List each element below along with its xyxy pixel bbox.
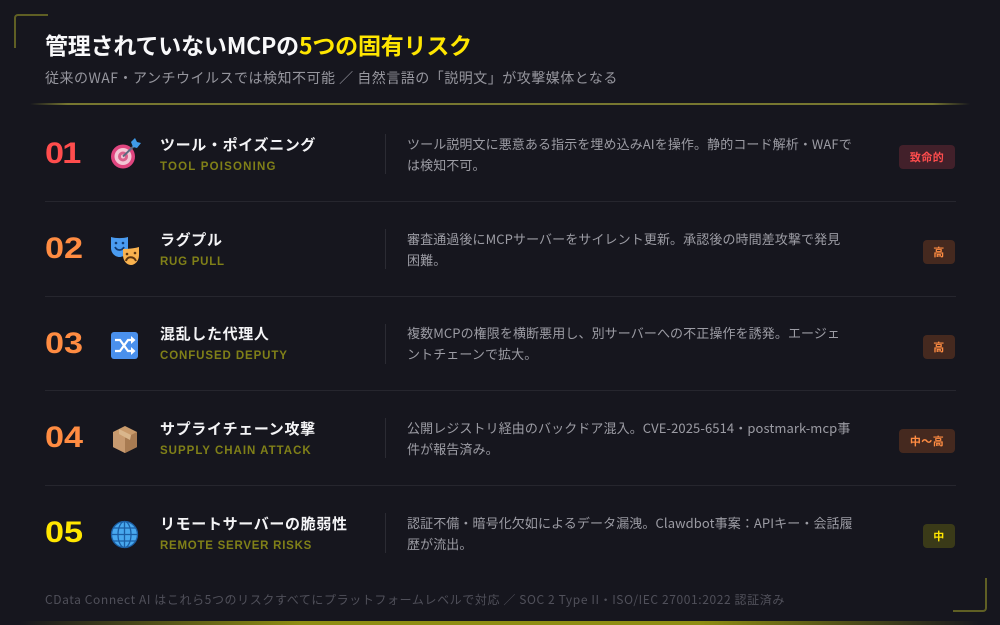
footer note: CData Connect AI はこれら5つのリスクすべてにプラットフォームレベルで対応 ／ SOC 2 Type II・ISO/IEC 27001:2022 認証済み	[45, 591, 785, 608]
description: 認証不備・暗号化欠如によるデータ漏洩。Clawdbot事案：APIキー・会話履	[407, 513, 853, 532]
english label: REMOTE SERVER RISKS	[160, 540, 312, 552]
description	[407, 418, 850, 458]
icon: theatre masks	[111, 237, 139, 265]
corner bracket: top left	[14, 14, 48, 48]
icon: target with dart	[111, 138, 141, 168]
risk name: サプライチェーン攻撃	[160, 418, 316, 439]
severity badge	[899, 429, 955, 453]
english label: SUPPLY CHAIN ATTACK	[160, 445, 312, 457]
number 02: 02	[45, 232, 83, 265]
risk row 02	[45, 229, 955, 269]
description	[407, 134, 852, 174]
severity badge: 高	[933, 244, 945, 260]
description: ントチェーンで拡大。	[407, 344, 537, 363]
corner bracket: bottom right	[953, 578, 987, 612]
description	[407, 513, 853, 553]
description: 審査通過後にMCPサーバーをサイレント更新。承認後の時間差攻撃で発見	[407, 229, 840, 248]
english label: RUG PULL	[160, 256, 225, 268]
risk name: 混乱した代理人	[160, 323, 270, 344]
description: 件が報告済み。	[407, 439, 499, 458]
column divider	[385, 418, 386, 458]
risk row 04	[45, 418, 955, 458]
description: 困難。	[407, 250, 446, 269]
severity badge: 高	[933, 339, 945, 355]
row separator	[45, 485, 956, 486]
column divider	[385, 513, 386, 553]
description: 公開レジストリ経由のバックドア混入。CVE-2025-6514・postmark-mcp事	[407, 418, 850, 437]
description: ツール説明文に悪意ある指示を埋め込みAIを操作。静的コード解析・WAFで	[407, 134, 852, 153]
subtitle: 従来のWAF・アンチウイルスでは検知不可能 ／ 自然言語の「説明文」が攻撃媒体となる	[45, 68, 618, 88]
severity badge	[923, 524, 955, 548]
severity badge	[923, 240, 955, 264]
icon: shuffle	[111, 332, 138, 359]
number 01: 01	[45, 137, 80, 170]
risk name: リモートサーバーの脆弱性	[160, 513, 348, 534]
icon: package box	[113, 426, 137, 453]
severity badge: 中	[933, 528, 945, 544]
risk name: ツール・ポイズニング	[160, 134, 316, 155]
description: 複数MCPの権限を横断悪用し、別サーバーへの不正操作を誘発。エージェ	[407, 323, 840, 342]
number 03: 03	[45, 327, 83, 360]
description: 歴が流出。	[407, 534, 473, 553]
row separator	[45, 390, 956, 391]
title: 管理されていないMCPの5つの固有リスク	[45, 27, 472, 61]
column divider	[385, 229, 386, 269]
risk row 03	[45, 323, 955, 364]
row separator	[45, 201, 956, 202]
risk row 01	[45, 134, 955, 174]
severity badge: 中〜高	[910, 433, 944, 449]
severity badge	[899, 145, 955, 169]
column divider	[385, 134, 386, 174]
english label: CONFUSED DEPUTY	[160, 350, 288, 362]
number 04: 04	[45, 421, 83, 454]
bottom accent bar	[0, 621, 1000, 625]
description	[407, 323, 840, 363]
risk name: ラグプル	[160, 229, 223, 250]
number 05: 05	[45, 516, 83, 549]
header divider	[30, 103, 970, 105]
english label: TOOL POISONING	[160, 161, 277, 173]
column divider	[385, 324, 386, 364]
description	[407, 229, 840, 269]
row separator	[45, 296, 956, 297]
description: は検知不可。	[407, 155, 486, 174]
severity badge	[923, 335, 955, 359]
icon: globe	[110, 520, 138, 548]
risk row 05	[45, 513, 955, 553]
severity badge: 致命的	[910, 149, 944, 165]
